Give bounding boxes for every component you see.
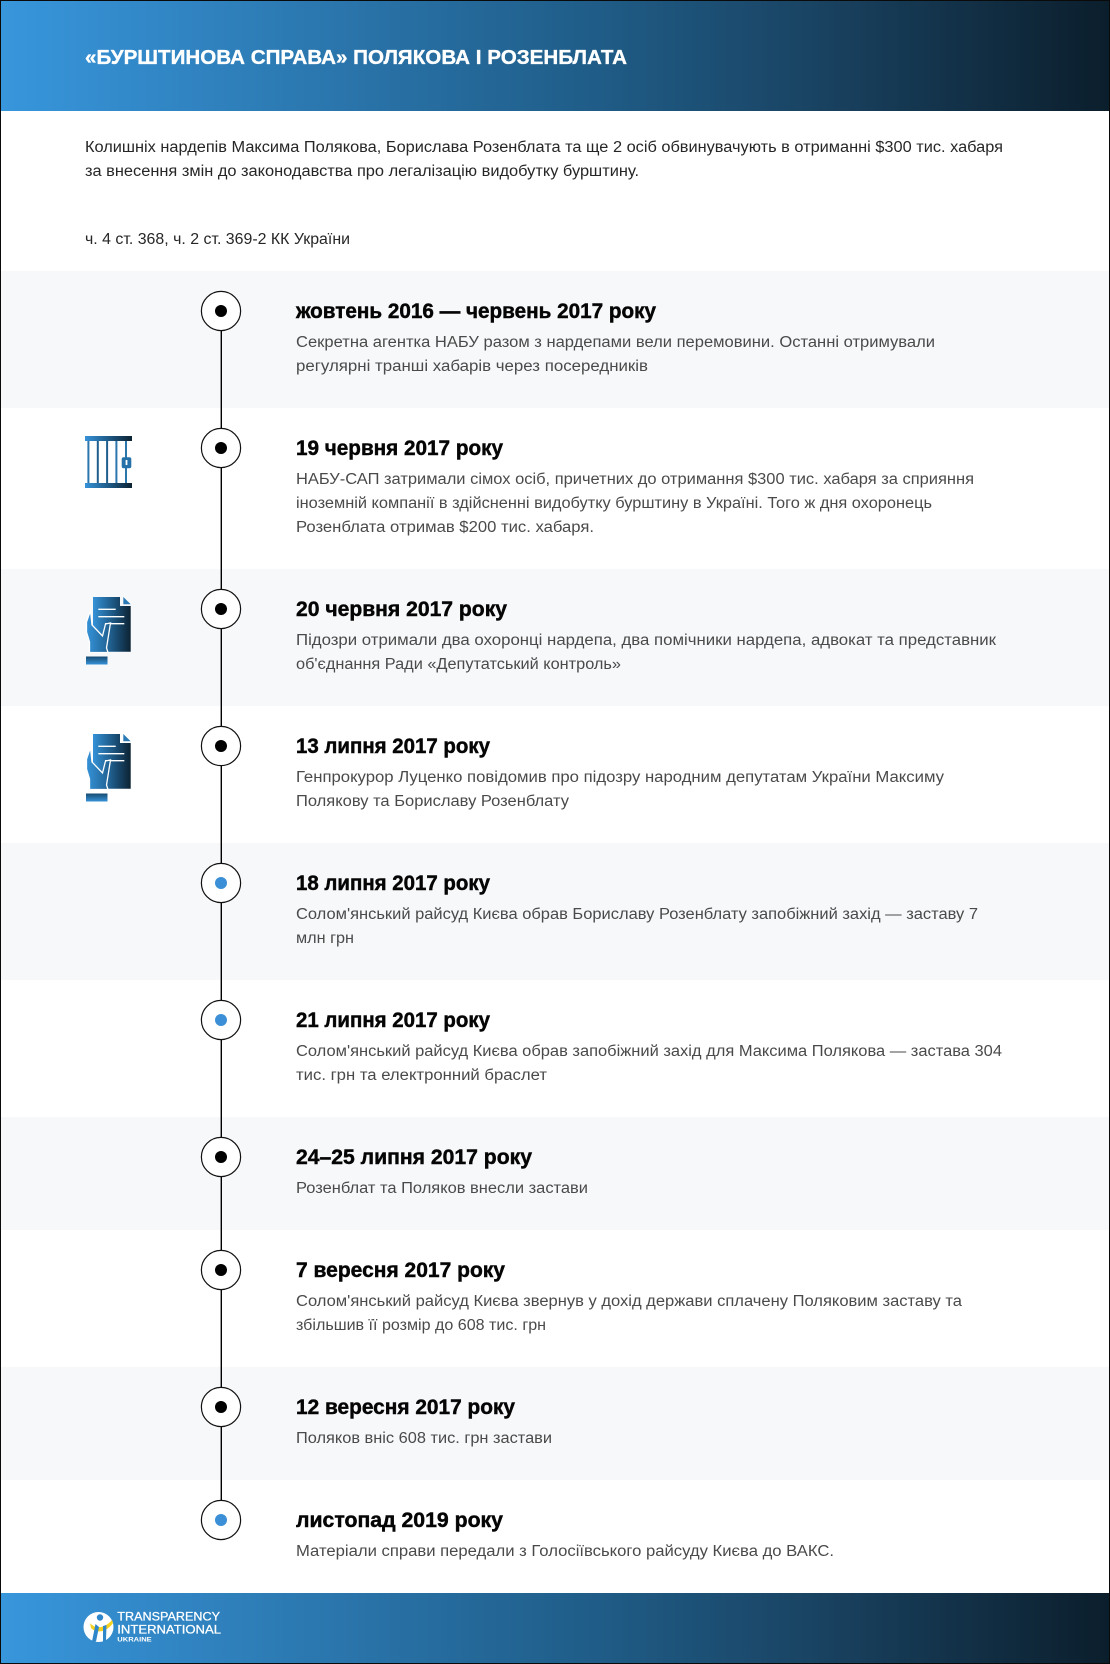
- panel: event 24–25 July 2017: [0, 1117, 1110, 1230]
- description: Матеріали справи передали з Голосіївського райсуду Києва до ВАКС.: [296, 1543, 834, 1560]
- description: Розенблата отримав $200 тис. хабаря.: [296, 519, 594, 536]
- description: [296, 769, 944, 810]
- footer banner: [0, 1593, 1110, 1664]
- panel: event 19 June 2017: [0, 408, 1110, 569]
- description: [296, 1293, 962, 1334]
- date heading: 20 червня 2017 року: [296, 598, 507, 621]
- description: Полякову та Бориславу Розенблату: [296, 793, 569, 810]
- description: збільшив її розмір до 608 тис. грн: [296, 1317, 546, 1334]
- icon: hand holding document: [86, 734, 131, 802]
- panel: event 7 September 2017: [0, 1230, 1110, 1367]
- description: [296, 906, 978, 947]
- description: Підозри отримали два охоронці нардепа, два помічники нардепа, адвокат та представник: [296, 632, 996, 649]
- panel: event 20 June 2017: [0, 569, 1110, 706]
- title: «БУРШТИНОВА СПРАВА» ПОЛЯКОВА І РОЗЕНБЛАТА: [85, 47, 627, 69]
- date heading: листопад 2019 року: [296, 1509, 503, 1532]
- logo: Transparency International Ukraine: [84, 1612, 222, 1643]
- date heading: 13 липня 2017 року: [296, 735, 490, 758]
- description: Солом'янський райсуд Києва обрав запобіжний захід для Максима Полякова — застава 304: [296, 1043, 1002, 1060]
- description: НАБУ-САП затримали сімох осіб, причетних до отримання $300 тис. хабаря за сприяння: [296, 471, 974, 488]
- icon: hand holding document: [86, 597, 131, 664]
- intro text block: за внесення змін до законодавства про легалізацію видобутку бурштину.: [85, 163, 639, 180]
- date heading: 19 червня 2017 року: [296, 437, 503, 460]
- description: Секретна агентка НАБУ разом з нардепами вели перемовини. Останні отримували: [296, 334, 935, 351]
- panel: event 13 July 2017: [0, 706, 1110, 843]
- date heading: 21 липня 2017 року: [296, 1009, 490, 1032]
- panel: event November 2019: [0, 1480, 1110, 1593]
- date heading: 7 вересня 2017 року: [296, 1259, 505, 1282]
- description: [296, 1043, 1002, 1084]
- panel: event 12 September 2017: [0, 1367, 1110, 1480]
- description: Розенблат та Поляков внесли застави: [296, 1180, 588, 1197]
- logo: Transparency International Ukraine: UKRAINE: [117, 1636, 152, 1643]
- panel: event October 2016 – June 2017: [0, 271, 1110, 408]
- panel: event 21 July 2017: [0, 980, 1110, 1117]
- intro text block: Колишніх нардепів Максима Полякова, Борислава Розенблата та ще 2 осіб обвинувачують в отриманні $300 тис. хабаря: [85, 139, 1003, 156]
- description: об'єднання Ради «Депутатський контроль»: [296, 656, 621, 673]
- timeline line and nodes: [201, 291, 241, 1540]
- header banner: [0, 0, 1110, 111]
- date heading: 18 липня 2017 року: [296, 872, 490, 895]
- description: [296, 471, 974, 536]
- logo: Transparency International Ukraine: TRANSPARENCY: [117, 1612, 220, 1624]
- icon: prison bars: [85, 436, 132, 488]
- description: [296, 334, 935, 375]
- legal articles reference: ч. 4 ст. 368, ч. 2 ст. 369-2 КК України: [85, 231, 350, 248]
- description: Генпрокурор Луценко повідомив про підозру народним депутатам України Максиму: [296, 769, 944, 786]
- logo: Transparency International Ukraine: INTERNATIONAL: [117, 1624, 222, 1636]
- description: іноземній компанії в здійсненні видобутку бурштину в Україні. Того ж дня охоронець: [296, 495, 932, 512]
- panel: event 18 July 2017: [0, 843, 1110, 980]
- description: тис. грн та електронний браслет: [296, 1067, 547, 1084]
- date heading: 12 вересня 2017 року: [296, 1396, 515, 1419]
- description: млн грн: [296, 930, 354, 947]
- description: Солом'янський райсуд Києва звернув у дохід держави сплачену Поляковим заставу та: [296, 1293, 962, 1310]
- description: [296, 632, 996, 673]
- date heading: жовтень 2016 — червень 2017 року: [295, 300, 656, 323]
- description: регулярні транші хабарів через посередників: [296, 358, 648, 375]
- date heading: 24–25 липня 2017 року: [296, 1146, 532, 1169]
- description: Солом'янський райсуд Києва обрав Бориславу Розенблату запобіжний захід — заставу 7: [296, 906, 978, 923]
- intro text block: [85, 139, 1003, 180]
- description: Поляков вніс 608 тис. грн застави: [296, 1430, 552, 1447]
